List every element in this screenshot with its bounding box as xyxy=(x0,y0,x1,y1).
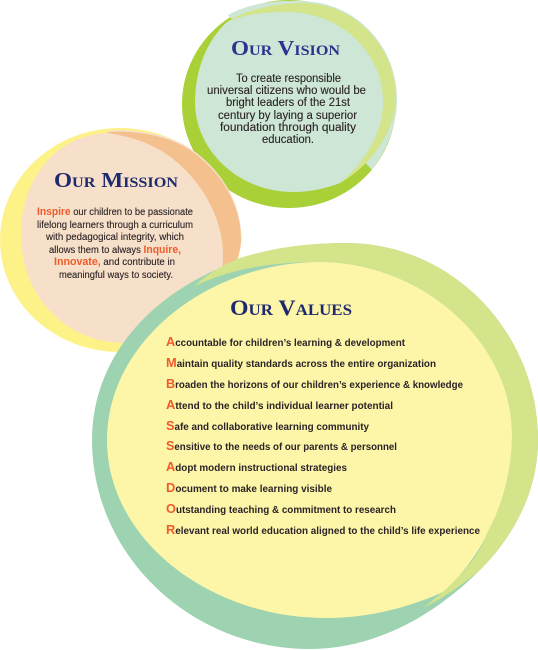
vision text xyxy=(207,73,366,146)
mission text: Innovate, and contribute in xyxy=(54,256,175,268)
panel: vision xyxy=(182,0,397,208)
mission text: lifelong learners through a curriculum xyxy=(37,220,193,231)
vision text: education. xyxy=(262,134,314,146)
values list: Attend to the child’s individual learner potential xyxy=(166,397,393,412)
values list: Broaden the horizons of our children’s experience & knowledge xyxy=(166,376,463,391)
mission title: Our Mission xyxy=(54,168,178,192)
values list xyxy=(166,334,480,537)
panel: values xyxy=(92,243,538,649)
mission yellow circle xyxy=(0,128,240,352)
vision text: To create responsible xyxy=(236,73,341,85)
values list: Document to make learning visible xyxy=(166,480,332,495)
vision text: century by laying a superior xyxy=(218,110,357,122)
values list: Adopt modern instructional strategies xyxy=(166,459,347,474)
values list: Accountable for children’s learning & development xyxy=(166,334,406,349)
mission text xyxy=(37,206,193,281)
mission pale outer edge xyxy=(108,130,242,298)
values list: Relevant real world education aligned to the child’s life experience xyxy=(166,522,480,537)
panel: mission xyxy=(0,128,242,352)
values list: Maintain quality standards across the entire organization xyxy=(166,355,436,370)
values list: Outstanding teaching & commitment to research xyxy=(166,501,396,516)
vision pale outer edge xyxy=(228,1,397,170)
values lime crescent xyxy=(195,243,538,608)
vision text: bright leaders of the 21st xyxy=(226,97,351,109)
mission text: meaningful ways to society. xyxy=(59,270,173,281)
vision lime crescent xyxy=(227,3,396,183)
values list: Safe and collaborative learning community xyxy=(166,418,369,433)
mission orange crescent xyxy=(107,132,241,300)
mission text: Inspire our children to be passionate xyxy=(37,206,193,218)
vision green circle xyxy=(182,0,396,208)
values list: Sensitive to the needs of our parents & personnel xyxy=(166,438,397,453)
vision mint disc xyxy=(195,12,383,192)
vision text: foundation through quality xyxy=(220,122,356,134)
vision text: universal citizens who would be xyxy=(207,85,366,97)
mission peach disc xyxy=(21,133,223,343)
vision title: Our Vision xyxy=(231,36,340,60)
mission text: allows them to always Inquire, xyxy=(49,244,181,256)
mission text: with pedagogical integrity, which xyxy=(45,232,184,243)
values teal circle xyxy=(92,243,538,649)
values yellow disc xyxy=(107,262,512,618)
values title: Our Values xyxy=(230,295,352,320)
